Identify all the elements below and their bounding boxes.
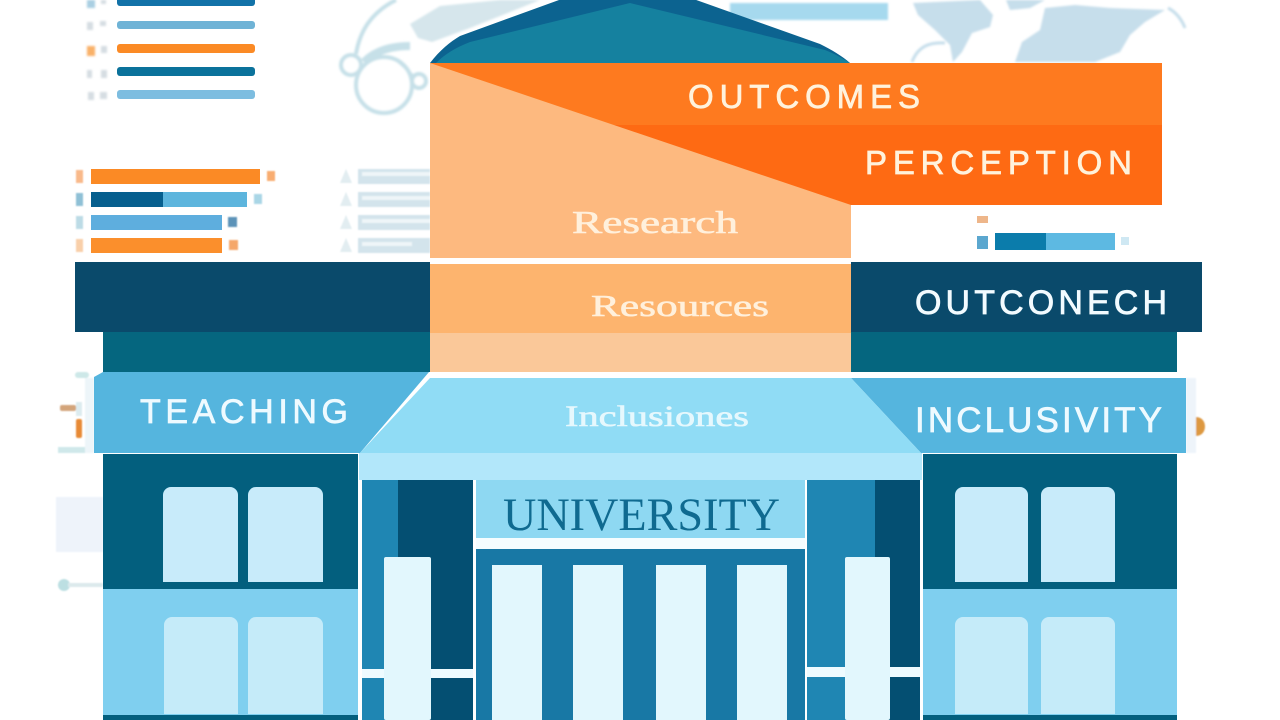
label: resources: Resources xyxy=(591,288,769,323)
chart: right small bar xyxy=(977,216,1129,250)
university sign xyxy=(476,480,805,549)
right column xyxy=(845,557,890,720)
label: research: Research xyxy=(572,204,738,240)
panel: center pediment xyxy=(360,378,921,453)
left entrance block xyxy=(362,480,473,720)
chart: pale bars xyxy=(340,169,430,253)
panel: teaching banner xyxy=(94,372,429,453)
pale triangles xyxy=(340,169,352,252)
map: right continents xyxy=(913,0,1165,62)
map: network rings xyxy=(341,0,426,113)
top roof band xyxy=(75,262,1202,372)
right entrance block xyxy=(807,480,920,720)
bar markers right xyxy=(228,171,275,250)
central colonnade xyxy=(476,549,805,720)
panel: orange banner xyxy=(430,63,1162,205)
heading: perception: PERCEPTION xyxy=(865,144,1132,181)
left column xyxy=(384,557,431,720)
map: left continent xyxy=(410,0,540,42)
heading: outcomes right: OUTCONECH xyxy=(915,284,1167,322)
panel: inclusivity banner xyxy=(851,378,1186,453)
map: arcs xyxy=(912,8,1185,62)
label: inclusion: Inclusiones xyxy=(565,400,749,433)
bar markers xyxy=(87,0,107,100)
heading: outcomes: OUTCOMES xyxy=(688,78,920,115)
upper windows xyxy=(955,487,1115,582)
heading: inclusivity: INCLUSIVITY xyxy=(915,401,1162,440)
heading: university: UNIVERSITY xyxy=(503,489,780,541)
right wing xyxy=(923,454,1177,720)
chart: top left bars xyxy=(87,0,255,100)
bar markers left xyxy=(76,170,83,252)
world map backdrop xyxy=(341,0,1185,113)
lower windows xyxy=(164,617,323,714)
upper windows xyxy=(163,487,323,582)
chart: middle left bars xyxy=(76,169,275,253)
panel: peach research xyxy=(430,63,851,258)
central columns xyxy=(492,565,787,720)
lower windows xyxy=(955,617,1115,714)
heading: teaching: TEACHING xyxy=(140,393,348,431)
lintel xyxy=(359,453,922,480)
right margin details xyxy=(1186,378,1205,453)
map: top bar xyxy=(730,3,888,20)
roof xyxy=(430,0,850,63)
left margin details xyxy=(56,372,103,591)
left wing xyxy=(103,454,358,720)
panel: peach resources xyxy=(430,258,851,372)
